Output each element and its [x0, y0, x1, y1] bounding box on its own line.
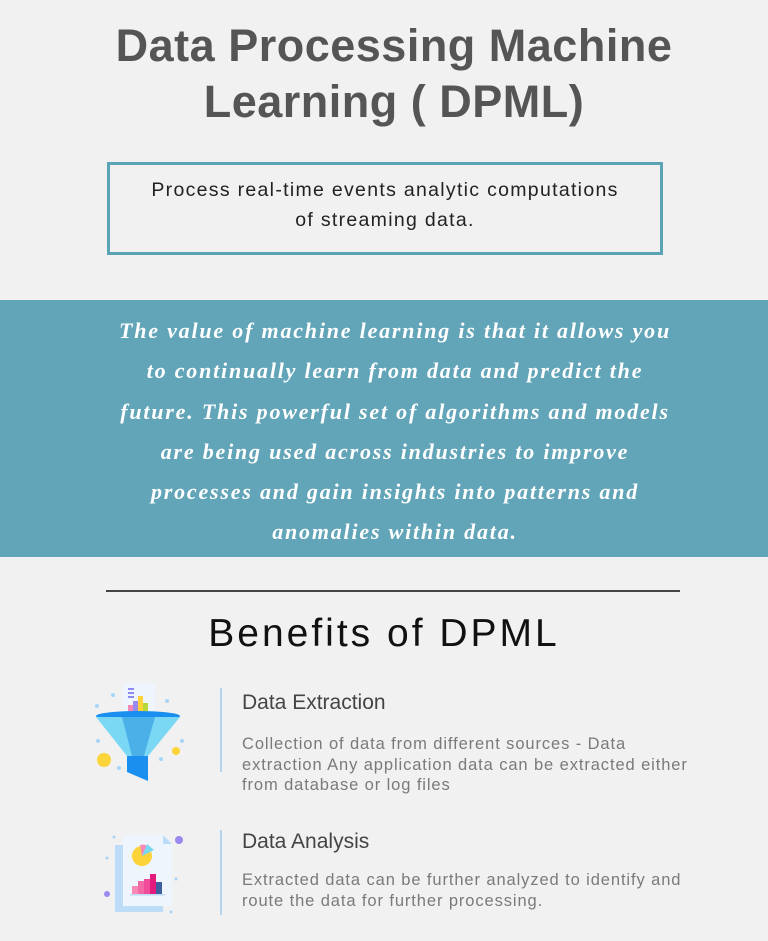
quote text: are being used across industries to improve: [161, 439, 629, 464]
body: [242, 871, 681, 910]
heading: benefits: Benefits of DPML: [208, 612, 560, 655]
benefit: data analysis: [242, 830, 681, 910]
icon: funnel: [95, 683, 184, 781]
subtitle box: Process real-time events analytic computations: [151, 179, 619, 201]
subtitle box: [107, 162, 663, 255]
title: Data Processing Machine: [116, 20, 672, 71]
subtitle box: of streaming data.: [295, 209, 475, 231]
quote text: anomalies within data.: [272, 519, 518, 544]
quote text: processes and gain insights into patterns and: [151, 479, 639, 504]
body: [242, 735, 688, 794]
icon: report: [104, 835, 183, 914]
heading: Data Extraction: [242, 691, 386, 714]
body: Extracted data can be further analyzed to identify and: [242, 871, 681, 889]
body: extraction Any application data can be extracted either: [242, 756, 688, 774]
heading: Data Analysis: [242, 830, 369, 853]
quote text: to continually learn from data and predict the: [147, 358, 643, 383]
benefit: data extraction: [242, 691, 688, 794]
teal band with quote: [0, 300, 768, 557]
body: route the data for further processing.: [242, 892, 543, 910]
quote text: The value of machine learning is that it allows you: [119, 318, 671, 343]
quote text: future. This powerful set of algorithms and models: [120, 399, 670, 424]
quote text: [119, 318, 671, 544]
title: [116, 20, 672, 127]
title: Learning ( DPML): [204, 76, 584, 127]
body: Collection of data from different sources - Data: [242, 735, 626, 753]
body: from database or log files: [242, 776, 451, 794]
